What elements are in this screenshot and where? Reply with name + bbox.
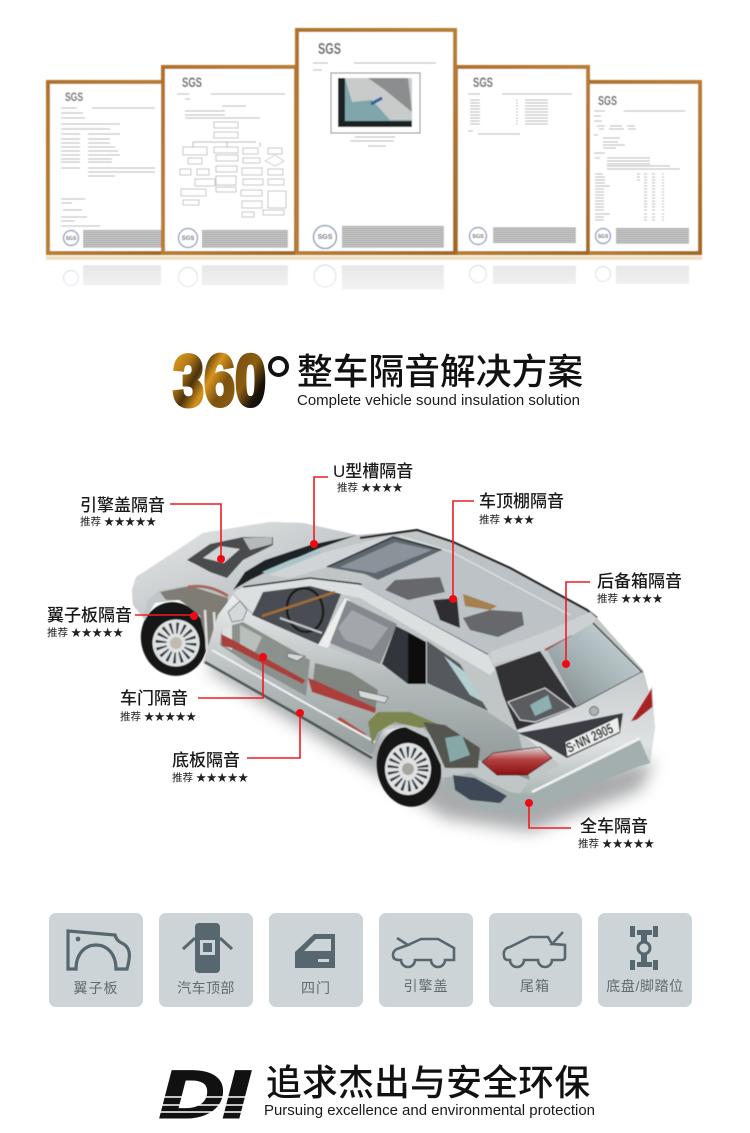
test photo — [331, 73, 420, 133]
callout: 翼子板隔音: 推荐 ★★★★★ — [47, 626, 124, 639]
rear side window — [427, 641, 488, 711]
tile: 翼子板 — [49, 913, 143, 1007]
callout: 后备箱隔音: 推荐 ★★★★ — [597, 592, 663, 605]
interior seats through the roof — [385, 577, 524, 637]
front pillar — [318, 598, 350, 648]
slogan text: 追求杰出与安全环保 — [266, 1063, 590, 1103]
number plate band — [518, 713, 623, 758]
sill line — [205, 662, 372, 758]
rear wheel — [371, 722, 447, 812]
heading: 360 degree solution — [173, 342, 583, 422]
callout: 底板隔音: 底板隔音 — [172, 750, 240, 770]
callout: 翼子板隔音: 翼子板隔音 — [47, 605, 132, 625]
dashboard and steering wheel — [262, 585, 335, 635]
front mirror — [228, 601, 247, 622]
tail light left — [482, 747, 552, 775]
callout: 底板隔音: 推荐 ★★★★★ — [172, 771, 249, 784]
tile: 尾箱: 尾箱 — [520, 978, 550, 994]
front window — [252, 586, 341, 645]
rear glass tailgate — [547, 623, 642, 707]
tile: 底盘/脚踏位: 底盘/脚踏位 — [606, 978, 684, 994]
logo: 360 gold numerals: 360 — [173, 342, 266, 422]
logo: DI — [150, 1057, 255, 1131]
tile: 引擎盖 — [379, 913, 473, 1007]
engine bay — [187, 537, 273, 578]
callout: U型槽隔音 — [310, 461, 413, 548]
certificate 5 — [589, 80, 702, 255]
certificate 1: SGS — [65, 90, 83, 104]
door handles — [287, 653, 388, 703]
certificate 2: SGS — [182, 236, 194, 242]
glass roof — [360, 542, 593, 656]
certificate 3 — [295, 28, 457, 255]
callout: 引擎盖隔音: 引擎盖隔音 — [80, 495, 165, 515]
windscreen frame strip — [233, 534, 395, 590]
certificate 1 — [46, 80, 166, 255]
tile: 四门 — [269, 913, 363, 1007]
callout: 全车隔音: 推荐 ★★★★★ — [578, 837, 655, 850]
certificate 4: SGS — [472, 234, 484, 240]
rear panel — [515, 672, 655, 815]
car body — [132, 522, 655, 815]
front wheel — [134, 596, 214, 682]
roof spoiler band — [490, 612, 597, 664]
callout: 车顶棚隔音: 车顶棚隔音 — [479, 491, 564, 511]
red insulation in rear door — [308, 678, 376, 713]
callout: 引擎盖隔音: 推荐 ★★★★★ — [80, 515, 157, 528]
certificate 1: SGS — [66, 236, 77, 242]
callout: 翼子板隔音 — [47, 605, 198, 639]
tile: 翼子板: 翼子板 — [74, 980, 118, 996]
tile: 尾箱 — [489, 913, 582, 1007]
heading text: 整车隔音解决方案 — [297, 352, 583, 392]
tile: 引擎盖: 引擎盖 — [404, 978, 448, 994]
callout: 引擎盖隔音 — [80, 495, 225, 563]
side door panels — [203, 595, 530, 780]
callout: 底板隔音 — [172, 709, 304, 784]
badge — [590, 706, 598, 716]
front wing cutaway — [160, 586, 228, 655]
rear door cutaway — [312, 663, 378, 712]
callout: 车门隔音 — [120, 653, 267, 723]
callout: 车门隔音: 推荐 ★★★★★ — [120, 710, 197, 723]
icon: degree ring — [270, 358, 287, 375]
callout: 全车隔音: 全车隔音 — [580, 816, 648, 836]
panel: part icons row — [49, 913, 692, 1007]
side pillars and rail — [233, 578, 495, 675]
callout: 车顶棚隔音 — [449, 491, 564, 603]
callout: 全车隔音 — [525, 799, 655, 850]
callout: 后备箱隔音: 后备箱隔音 — [597, 571, 682, 591]
heading subtitle: Complete vehicle sound insulation solution — [297, 392, 580, 409]
certificate reflections — [46, 256, 702, 289]
callout: 后备箱隔音 — [562, 571, 682, 668]
certificate 4 — [457, 65, 590, 255]
trunk interior — [495, 651, 577, 730]
underfloor heat shield — [453, 775, 507, 803]
callout: 车门隔音: 车门隔音 — [120, 688, 188, 708]
tile: 四门: 四门 — [301, 980, 331, 996]
callout: U型槽隔音: 推荐 ★★★★ — [337, 481, 403, 494]
certificate 3: SGS — [318, 234, 333, 241]
rear arch components — [423, 722, 480, 768]
third window — [382, 626, 408, 684]
sunroof glass — [327, 537, 442, 580]
footer slogan — [150, 1057, 595, 1131]
tile: 汽车顶部: 汽车顶部 — [177, 980, 235, 996]
certificate 2: SGS — [182, 74, 202, 90]
certificate 4: SGS — [473, 74, 493, 90]
red insulation in front door — [221, 634, 305, 684]
certificate 5: SGS — [598, 234, 609, 240]
rear arch green underlay — [368, 712, 440, 745]
rear bumper lower — [443, 740, 650, 815]
certificate 5: SGS — [598, 94, 617, 108]
panel: SGS certificates — [46, 28, 702, 289]
tile: 汽车顶部 — [159, 913, 253, 1007]
second window — [330, 600, 397, 664]
callout: U型槽隔音: U型槽隔音 — [333, 461, 413, 481]
car shadow — [205, 650, 655, 832]
B pillar dark — [408, 632, 426, 684]
tail light right — [630, 687, 653, 722]
car cutaway illustration — [132, 522, 655, 832]
licence plate: S·NN 2905 — [564, 720, 616, 756]
front door cutaway — [220, 622, 310, 696]
callout: 车顶棚隔音: 推荐 ★★★ — [479, 513, 535, 526]
tile: 底盘/脚踏位 — [598, 913, 692, 1007]
slogan subtitle: Pursuing excellence and environmental protection — [264, 1102, 595, 1119]
hood — [132, 522, 357, 618]
certificate 2 — [161, 65, 298, 255]
logo: DI: DI — [160, 1057, 250, 1131]
certificate 3: SGS — [318, 41, 341, 58]
